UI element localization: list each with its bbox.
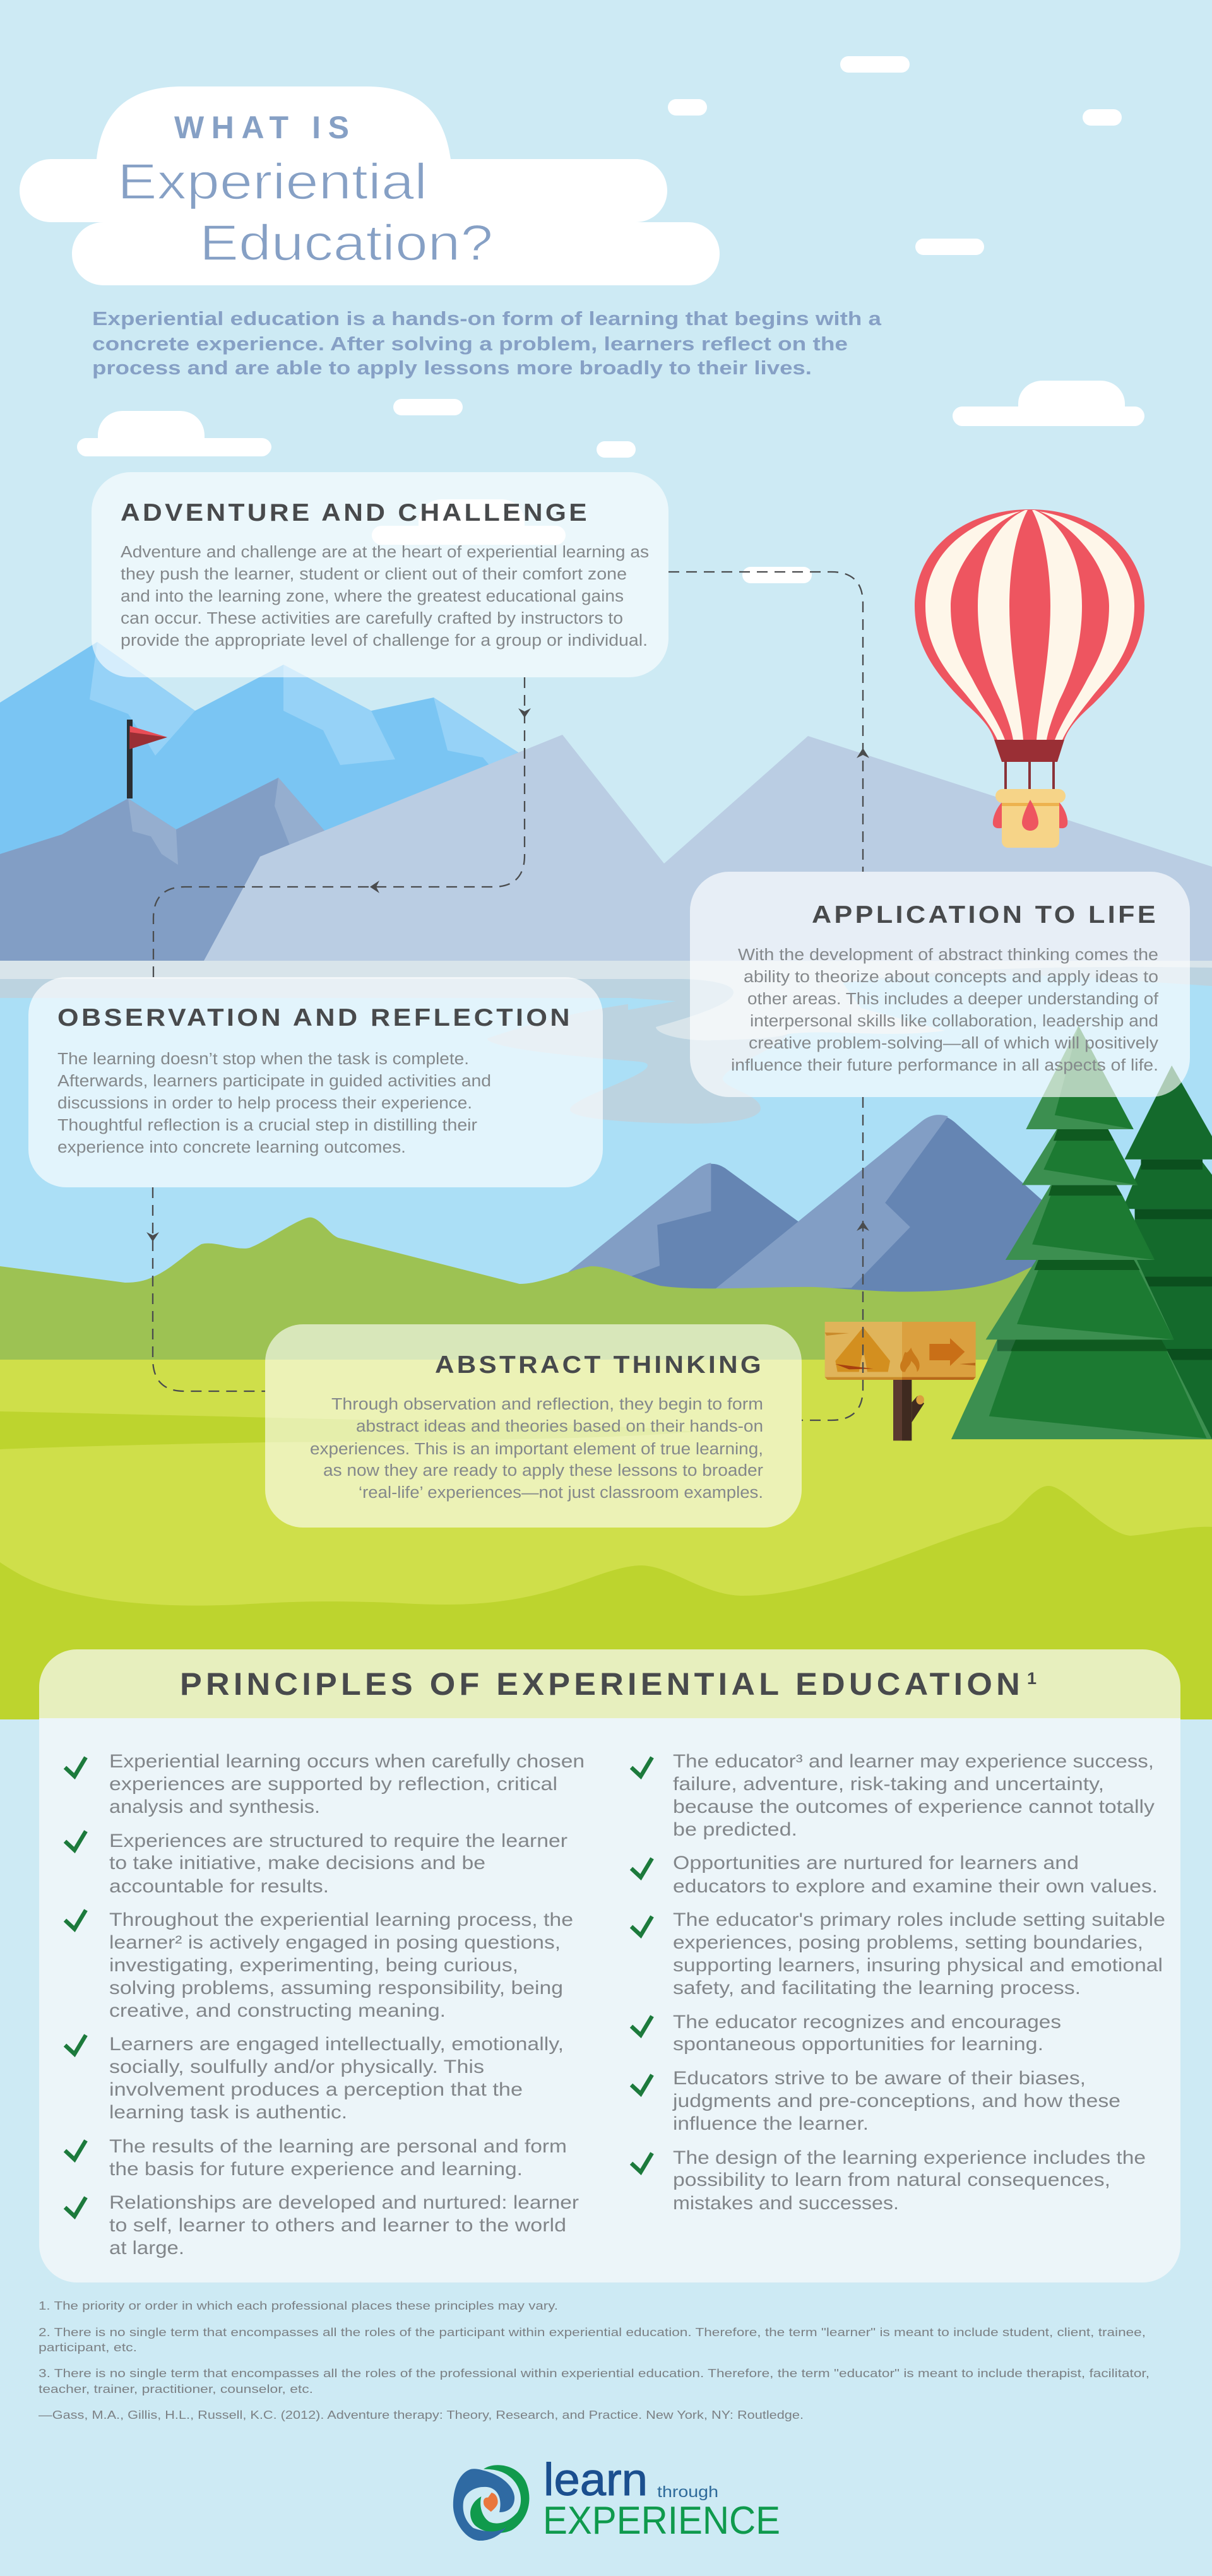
- body text: [310, 1396, 764, 1502]
- principles list: right column: mistakes and successes.: [673, 2193, 899, 2214]
- principles list: right column: The educator³ and learner may experience success,: [673, 1751, 1154, 1772]
- distant mountains: [568, 1115, 1102, 1301]
- intro paragraph: concrete experience. After solving a problem, learners reflect on the: [92, 333, 848, 355]
- body text: they push the learner, student or client out of their comfort zone: [121, 566, 627, 583]
- body text: influence their future performance in all aspects of life.: [731, 1057, 1158, 1074]
- back pine tree: [1122, 1065, 1212, 1439]
- principles list: right column: educators to explore and examine their own values.: [673, 1876, 1158, 1897]
- panel: application to life: [690, 872, 1190, 1097]
- principles list: right column: experiences, posing problems, setting boundaries,: [673, 1932, 1143, 1953]
- body text: other areas. This includes a deeper understanding of: [747, 990, 1159, 1008]
- principles list: left column: involvement produces a perception that the: [109, 2079, 523, 2100]
- small clouds: [77, 56, 1144, 583]
- principles list: left column: investigating, experimenting, being curious,: [109, 1955, 518, 1976]
- principles list: left column: to take initiative, make decisions and be: [109, 1853, 485, 1873]
- icon: swirl mark: [453, 2465, 529, 2541]
- panel: adventure and challenge: [92, 472, 668, 677]
- intro paragraph: [92, 307, 882, 379]
- body text: provide the appropriate level of challenge for a group or individual.: [121, 632, 648, 650]
- body text: The learning doesn’t stop when the task is complete.: [57, 1050, 469, 1068]
- body text: [121, 543, 649, 650]
- principles list: right column: failure, adventure, risk-taking and uncertainty,: [673, 1774, 1104, 1795]
- footnotes: participant, etc.: [39, 2341, 137, 2354]
- principles list: left column: at large.: [109, 2238, 184, 2258]
- principles list: left column: the basis for future experience and learning.: [109, 2159, 523, 2180]
- intro paragraph: process and are able to apply lessons more broadly to their lives.: [92, 357, 812, 379]
- principles list: left column: learner² is actively engaged in posing questions,: [109, 1932, 561, 1953]
- heading: ABSTRACT THINKING: [435, 1351, 764, 1379]
- body text: Adventure and challenge are at the heart of experiential learning as: [121, 543, 649, 561]
- title cloud: [20, 86, 720, 285]
- principles list: right column: spontaneous opportunities for learning.: [673, 2034, 1043, 2055]
- dashed flow path with arrows: [146, 572, 869, 1420]
- principles list: right column: supporting learners, insuring physical and emotional: [673, 1955, 1163, 1976]
- icon: check marks left: [65, 1757, 86, 2216]
- body text: Thoughtful reflection is a crucial step in distilling their: [57, 1117, 478, 1134]
- mountain range: blue peaks: [0, 642, 568, 961]
- footnotes: —Gass, M.A., Gillis, H.L., Russell, K.C. (2012). Adventure therapy: Theory, Research, and Practice. New York, NY: Routledge.: [39, 2409, 804, 2421]
- principles list: left column: solving problems, assuming responsibility, being: [109, 1978, 563, 1998]
- body text: and into the learning zone, where the greatest educational gains: [121, 588, 624, 605]
- title text: Experiential: [117, 153, 427, 210]
- body text: creative problem-solving—all of which will positively: [749, 1035, 1158, 1052]
- logo: learn through experience: [453, 2455, 780, 2543]
- principles list: left column: Experiences are structured to require the learner: [109, 1831, 567, 1851]
- lime meadow: [0, 1360, 1212, 1719]
- body text: experiences. This is an important element of true learning,: [310, 1440, 763, 1458]
- principles list: left column: to self, learner to others and learner to the world: [109, 2215, 566, 2236]
- principles list: right column: The educator's primary roles include setting suitable: [673, 1909, 1165, 1930]
- footnotes: 3. There is no single term that encompasses all the roles of the professional within experiential education. Therefore, the term "educator" is meant to include therapist, facilitator,: [39, 2367, 1150, 2380]
- logo: learn through experience: learn: [544, 2455, 648, 2505]
- panel: principles of experiential education: [39, 1649, 1180, 2282]
- panel: abstract thinking: [265, 1324, 802, 1528]
- body text: as now they are ready to apply these lessons to broader: [323, 1462, 764, 1480]
- front pine tree: [951, 1026, 1212, 1439]
- wooden sign with tent, fire and arrow icons: [825, 1322, 976, 1440]
- body text: ability to theorize about concepts and apply ideas to: [744, 968, 1158, 986]
- body text: discussions in order to help process their experience.: [57, 1095, 472, 1112]
- principles list: left column: The results of the learning are personal and form: [109, 2136, 567, 2157]
- body text: abstract ideas and theories based on their hands-on: [356, 1418, 763, 1435]
- footnotes: [39, 2300, 1150, 2421]
- logo: learn through experience: EXPERIENCE: [543, 2499, 780, 2543]
- heading: OBSERVATION AND REFLECTION: [57, 1004, 573, 1031]
- principles list: left column: learning task is authentic.: [109, 2102, 347, 2123]
- principles list: right column: safety, and facilitating the learning process.: [673, 1978, 1081, 1998]
- principles list: left column: [65, 1751, 585, 2258]
- icon: summit flag: [127, 720, 167, 798]
- principles list: right column: because the outcomes of experience cannot totally: [673, 1796, 1155, 1817]
- body text: With the development of abstract thinking comes the: [738, 946, 1158, 964]
- principles list: right column: Educators strive to be aware of their biases,: [673, 2068, 1086, 2089]
- icon: check marks right: [631, 1757, 652, 2172]
- title text: Education?: [199, 215, 493, 271]
- principles list: right column: influence the learner.: [673, 2113, 869, 2134]
- principles list: left column: creative, and constructing meaning.: [109, 2000, 446, 2021]
- lake and mist: [0, 961, 1212, 1365]
- principles list: right column: Opportunities are nurtured for learners and: [673, 1853, 1079, 1873]
- body text: experience into concrete learning outcomes.: [57, 1139, 406, 1156]
- principles list: left column: Learners are engaged intellectually, emotionally,: [109, 2034, 564, 2055]
- principles list: left column: Throughout the experiential learning process, the: [109, 1909, 573, 1930]
- body text: interpersonal skills like collaboration, leadership and: [750, 1012, 1158, 1030]
- mountain range: pale grey-blue peaks: [204, 735, 1212, 961]
- logo: learn through experience: through: [657, 2483, 718, 2501]
- heading: ADVENTURE AND CHALLENGE: [121, 499, 590, 526]
- principles list: left column: Experiential learning occurs when carefully chosen: [109, 1751, 585, 1772]
- intro paragraph: Experiential education is a hands-on form of learning that begins with a: [92, 307, 882, 329]
- title text: [117, 110, 493, 271]
- principles list: left column: accountable for results.: [109, 1876, 329, 1897]
- body text: can occur. These activities are carefully crafted by instructors to: [121, 610, 623, 627]
- principles list: right column: possibility to learn from natural consequences,: [673, 2169, 1110, 2190]
- principles list: right column: The educator recognizes and encourages: [673, 2012, 1061, 2033]
- principles list: right column: [631, 1751, 1165, 2214]
- footnotes: 1. The priority or order in which each professional places these principles may vary.: [39, 2300, 558, 2312]
- principles list: left column: experiences are supported by reflection, critical: [109, 1774, 557, 1795]
- heading: APPLICATION TO LIFE: [812, 901, 1158, 929]
- footnotes: teacher, trainer, practitioner, counselor, etc.: [39, 2383, 313, 2395]
- principles list: right column: The design of the learning experience includes the: [673, 2147, 1146, 2168]
- principles list: left column: Relationships are developed and nurtured: learner: [109, 2192, 579, 2213]
- body text: Afterwards, learners participate in guided activities and: [57, 1072, 491, 1090]
- principles list: right column: be predicted.: [673, 1819, 797, 1840]
- green hills: [0, 1218, 1212, 1363]
- hot air balloon: [915, 509, 1144, 848]
- heading: 1: [1027, 1669, 1037, 1688]
- mountain range: dark foreground peak: [0, 778, 391, 961]
- body text: ‘real-life’ experiences—not just classroom examples.: [359, 1484, 763, 1502]
- footnotes: 2. There is no single term that encompasses all the roles of the participant within experiential education. Therefore, the term "learner" is meant to include student, client, trainee,: [39, 2326, 1146, 2339]
- principles list: left column: socially, soulfully and/or physically. This: [109, 2057, 484, 2077]
- arrow: down to observation path: [518, 708, 531, 718]
- body text: [57, 1050, 491, 1156]
- panel: observation and reflection: [28, 977, 603, 1187]
- heading: PRINCIPLES OF EXPERIENTIAL EDUCATION: [180, 1666, 1024, 1702]
- principles list: right column: judgments and pre-conceptions, and how these: [672, 2091, 1120, 2111]
- body text: [731, 946, 1159, 1074]
- body text: Through observation and reflection, they begin to form: [331, 1396, 763, 1413]
- title text: WHAT IS: [174, 110, 349, 145]
- principles list: left column: analysis and synthesis.: [109, 1796, 320, 1817]
